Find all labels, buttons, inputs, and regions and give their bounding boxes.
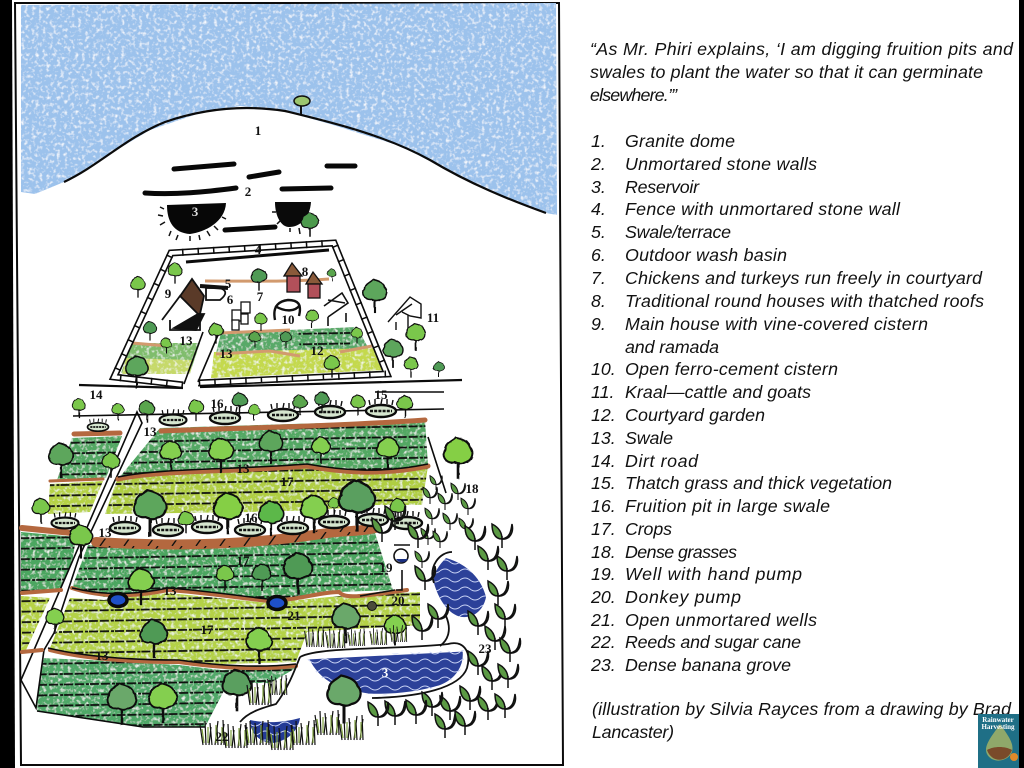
- numbered legend: 1.: [591, 131, 606, 151]
- quote: swales to plant the water so that it can germinate: [590, 62, 983, 82]
- diagram number labels: 13: [96, 648, 109, 663]
- numbered legend: 16.: [591, 496, 616, 516]
- unmortared stone walls: [145, 164, 355, 230]
- diagram number labels: 3: [382, 665, 389, 680]
- numbered legend: 14.: [591, 451, 616, 471]
- round thatched houses: [284, 263, 322, 298]
- numbered legend: Swale/terrace: [625, 222, 731, 242]
- numbered legend: Dirt road: [625, 451, 699, 471]
- upper reservoirs: [158, 202, 311, 241]
- quote: [590, 39, 1014, 105]
- dirt road line: [79, 380, 462, 388]
- courtyard garden fills: [121, 327, 384, 378]
- diagram number labels: 13: [164, 583, 177, 598]
- diagram number labels: 7: [257, 289, 264, 304]
- dirt road: [21, 412, 142, 708]
- numbered legend: 12.: [591, 405, 616, 425]
- diagram number labels: 1: [255, 123, 261, 138]
- channel between ponds: [432, 552, 452, 646]
- numbered legend: and ramada: [625, 337, 719, 357]
- courtyard drive edges: [184, 332, 218, 384]
- terrace farmland: [21, 392, 446, 727]
- open unmortared wells: [109, 594, 286, 610]
- numbered legend: 15.: [591, 473, 616, 493]
- numbered legend: 5.: [591, 222, 606, 242]
- lone tree on summit: [294, 96, 310, 114]
- numbered legend: 13.: [591, 428, 616, 448]
- diagram number labels: 16: [210, 396, 224, 411]
- diagram number labels: 16: [244, 510, 258, 525]
- diagram number labels: 6: [227, 292, 234, 307]
- field colour bands: [21, 420, 428, 727]
- diagram number labels: 9: [165, 286, 172, 301]
- dense grasses: [415, 476, 475, 568]
- main house with vine-covered cistern and ramada: [162, 279, 228, 330]
- fenced courtyard: [79, 243, 462, 388]
- main pond: [307, 650, 464, 695]
- planted crop rows: [21, 420, 428, 727]
- numbered legend: Dense banana grove: [625, 655, 791, 675]
- illustration credit: Lancaster): [592, 722, 674, 742]
- small lower pond: [250, 718, 300, 743]
- illustration credit: (illustration by Silvia Rayces from a drawing by Brad: [592, 699, 1012, 719]
- numbered legend: Crops: [625, 519, 672, 539]
- diagram number labels: 14: [90, 387, 103, 402]
- dense banana grove: [368, 506, 521, 738]
- diagram number labels: 13: [236, 461, 250, 476]
- illustration panel: hillside rainwater harvesting landscape: [15, 3, 563, 765]
- brown swales: [22, 420, 428, 668]
- trees: [32, 213, 472, 725]
- book cover thumbnail: Harvesting: [981, 723, 1015, 731]
- numbered legend: 17.: [591, 519, 616, 539]
- numbered legend: 18.: [591, 542, 616, 562]
- numbered legend: Open unmortared wells: [625, 610, 817, 630]
- kraal: [388, 297, 421, 332]
- diagram number labels: 22: [216, 729, 228, 744]
- diagram number labels: 17: [236, 553, 250, 568]
- numbered legend: 3.: [591, 177, 606, 197]
- numbered legend: Granite dome: [625, 131, 735, 151]
- diagram number labels: 18: [466, 481, 479, 496]
- numbered legend: Open ferro-cement cistern: [625, 359, 838, 379]
- quote: elsewhere.’”: [590, 85, 678, 105]
- numbered legend: Unmortared stone walls: [625, 154, 817, 174]
- diagram number labels: 10: [282, 312, 294, 327]
- numbered legend: 9.: [591, 314, 606, 334]
- diagram number labels: 2: [245, 184, 251, 199]
- diagram number labels: 5: [225, 276, 232, 291]
- diagram number labels: [90, 123, 492, 744]
- numbered legend: 10.: [591, 359, 616, 379]
- reeds and sugar cane: [200, 624, 407, 750]
- numbered legend: Outdoor wash basin: [625, 245, 787, 265]
- numbered legend: 22.: [590, 632, 616, 652]
- numbered legend: Main house with vine-covered cistern: [625, 314, 928, 334]
- numbered legend: 7.: [591, 268, 606, 288]
- granite dome outline: [64, 108, 546, 213]
- numbered legend: 19.: [591, 564, 616, 584]
- numbered legend: 2.: [590, 154, 606, 174]
- dense courtyard planting: [298, 328, 350, 352]
- numbered legend: Swale: [625, 428, 673, 448]
- numbered legend: Traditional round houses with thatched roofs: [625, 291, 984, 311]
- open ferro-cement cistern: [274, 300, 300, 320]
- numbered legend: Reeds and sugar cane: [625, 632, 801, 652]
- terrace swale stripe: [132, 279, 372, 356]
- numbered legend: Thatch grass and thick vegetation: [625, 473, 892, 493]
- book cover thumbnail: Rainwater: [982, 716, 1014, 724]
- diagram number labels: 23: [478, 641, 492, 656]
- numbered legend: Fruition pit in large swale: [625, 496, 830, 516]
- diagram number labels: 13: [220, 346, 233, 361]
- numbered legend: Kraal—cattle and goats: [625, 382, 811, 402]
- stone fence: [114, 243, 387, 385]
- tree beside main pond: [327, 676, 361, 724]
- diagram number labels: 13: [144, 424, 157, 439]
- diagram number labels: 21: [288, 608, 300, 623]
- diagram number labels: 13: [180, 333, 193, 348]
- upper right pond: [434, 558, 486, 617]
- numbered legend: 21.: [590, 610, 616, 630]
- numbered legend: 20.: [590, 587, 616, 607]
- numbered legend: [590, 131, 984, 675]
- numbered legend: Courtyard garden: [625, 405, 765, 425]
- numbered legend: Dense grasses: [625, 542, 737, 562]
- numbered legend: Well with hand pump: [625, 564, 802, 584]
- back wall thick line: [186, 250, 329, 262]
- diagram number labels: 17: [200, 622, 214, 637]
- numbered legend: Donkey pump: [625, 587, 741, 607]
- diagram number labels: 20: [392, 593, 404, 608]
- numbered legend: Reservoir: [625, 177, 700, 197]
- ramada shelter: [324, 293, 348, 326]
- sky: [21, 3, 557, 215]
- numbered legend: 23.: [590, 655, 616, 675]
- pond outline: [240, 643, 468, 722]
- book cover thumbnail: [978, 714, 1019, 768]
- numbered legend: 6.: [591, 245, 606, 265]
- numbered legend: 8.: [591, 291, 606, 311]
- diagram number labels: 13: [98, 525, 112, 540]
- numbered legend: Chickens and turkeys run freely in courtyard: [625, 268, 983, 288]
- swale hatching: [96, 524, 378, 549]
- ponds: [240, 552, 486, 743]
- quote: “As Mr. Phiri explains, ‘I am digging fruition pits and: [590, 39, 1014, 59]
- illustration credit: [592, 699, 1012, 742]
- wash basin: [232, 302, 250, 330]
- thatch row fruition pits: [52, 399, 422, 536]
- numbered legend: 11.: [591, 382, 614, 402]
- diagram number labels: 19: [380, 560, 393, 575]
- diagram number labels: 4: [255, 242, 262, 257]
- diagram number labels: 12: [310, 343, 324, 358]
- diagram number labels: 15: [374, 387, 388, 402]
- diagram number labels: 3: [192, 204, 199, 219]
- donkey pump: [360, 590, 395, 610]
- swale edge lines: [37, 392, 446, 727]
- numbered legend: Fence with unmortared stone wall: [625, 199, 901, 219]
- right black edge: [1019, 0, 1024, 768]
- left black edge: [0, 0, 15, 768]
- diagram number labels: 17: [280, 474, 294, 489]
- well with hand pump: [394, 545, 410, 590]
- diagram number labels: 11: [427, 310, 439, 325]
- illustration frame: [15, 3, 563, 765]
- diagram number labels: 8: [302, 264, 309, 279]
- numbered legend: 4.: [591, 199, 606, 219]
